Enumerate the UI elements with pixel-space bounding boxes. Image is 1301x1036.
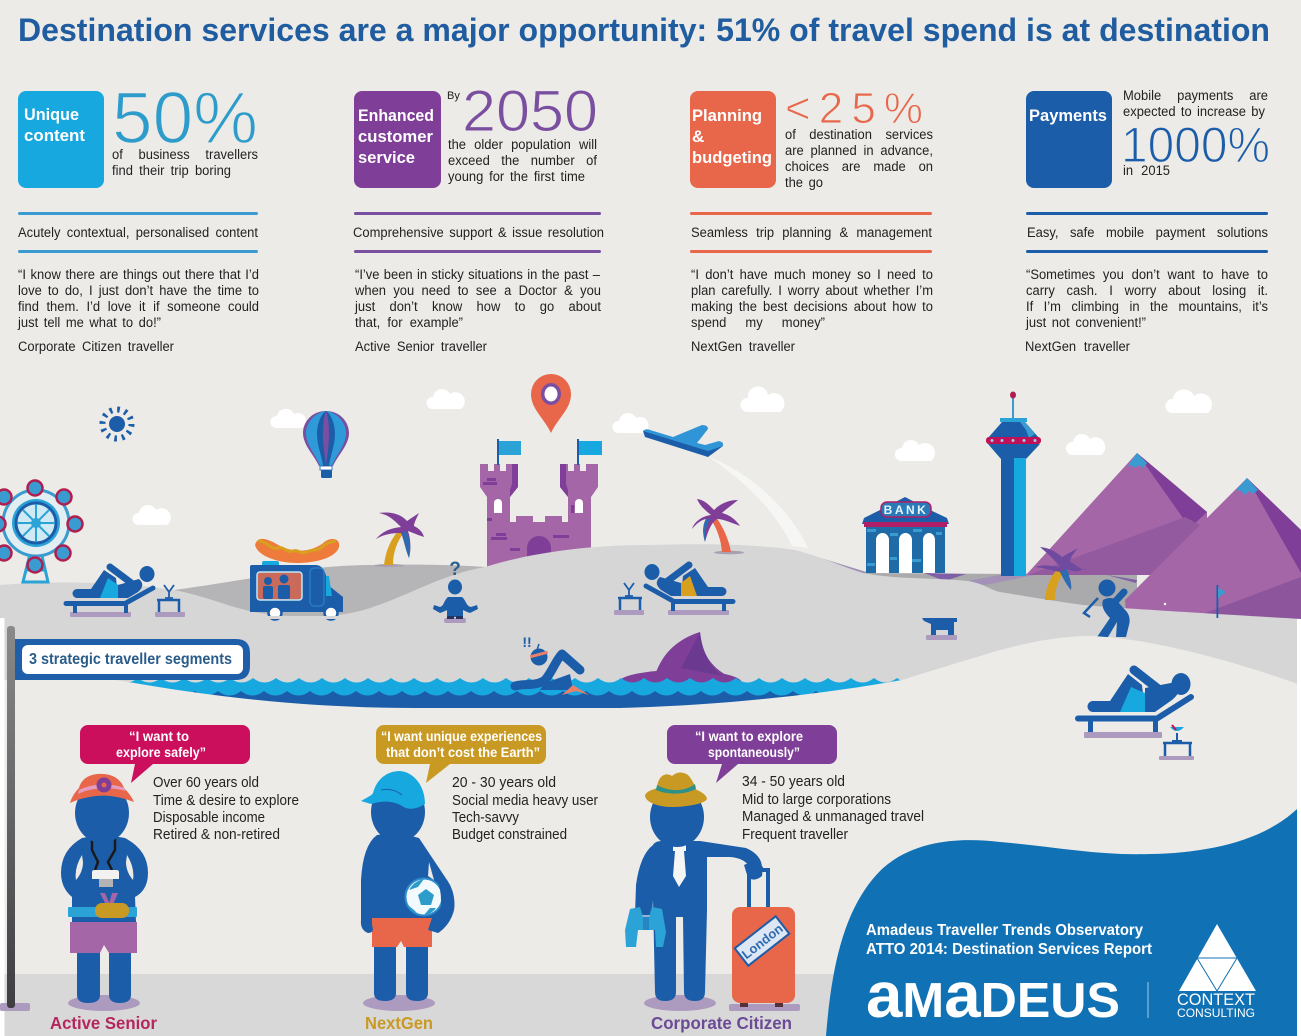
- flag pole and banner: 3 strategic traveller segments: [0, 626, 250, 1011]
- big stat under 25%: <25%: [785, 84, 923, 133]
- quote: “I know there are things out there that I’d: [18, 267, 259, 282]
- icon: plane with trail: [643, 425, 808, 548]
- persona facts: NextGen: [452, 775, 598, 843]
- quote: making the best decisions about how to: [691, 299, 933, 314]
- quote: find them. I’d love it if someone could: [18, 299, 259, 314]
- logo: Context Consulting: [1177, 924, 1256, 1020]
- icon: confused traveller with question mark: ?: [449, 559, 461, 580]
- persona facts: Active Senior: Retired & non-retired: [153, 827, 280, 843]
- quote: love to do, I just don’t have the time to: [18, 283, 259, 298]
- attribution: Active Senior traveller: [355, 339, 487, 354]
- divider between logos: [1148, 982, 1149, 1018]
- quote: carry cash. I worry about losing it.: [1026, 283, 1268, 298]
- stat description: find their trip boring: [112, 163, 231, 178]
- logo: Context Consulting: CONTEXT: [1177, 991, 1255, 1009]
- stat description: choices are made on: [785, 159, 933, 174]
- speech bubble: Active Senior: [80, 725, 250, 783]
- water waves: [100, 678, 910, 721]
- icon: confused traveller with question mark: [433, 559, 478, 623]
- icon: golf flag: [1164, 585, 1226, 618]
- stat description: the older population will: [448, 137, 597, 152]
- stat description: are planned in advance,: [785, 143, 933, 158]
- quote: [18, 267, 259, 330]
- blue corner panel: [826, 805, 1301, 1036]
- persona facts: Corporate Citizen: Mid to large corporations: [742, 792, 891, 808]
- title: Destination services are a major opportunity: 51% of travel spend is at destination: [18, 12, 1270, 48]
- speech bubble: NextGen: “I want unique experiences: [381, 728, 542, 744]
- panel: Payments: [1025, 88, 1270, 354]
- icon: hot dog food van: [250, 539, 344, 620]
- quote: “Sometimes you don’t want to have to: [1026, 267, 1268, 282]
- dividers: [354, 212, 601, 253]
- speech bubble: NextGen: [376, 725, 546, 783]
- white edge strips: [0, 618, 1301, 1036]
- value proposition: Acutely contextual, personalised content: [18, 225, 258, 240]
- speech bubble: Active Senior: “I want to: [129, 728, 189, 744]
- quote: just not convenient!”: [1026, 315, 1146, 330]
- label box: Unique content: content: [24, 126, 85, 145]
- label box: Unique content: Unique: [24, 105, 79, 124]
- report credit text: Amadeus Traveller Trends Observatory: [866, 922, 1143, 939]
- wedge: distant grey dune: [174, 565, 485, 625]
- value proposition: Seamless trip planning & management: [691, 225, 932, 240]
- label box: Payments: Payments: [1029, 106, 1107, 125]
- icon: mountains: [1026, 453, 1301, 622]
- character: NextGen: [361, 771, 454, 1011]
- report credit text: ATTO 2014: Destination Services Report: [866, 941, 1153, 958]
- big stat By 2050: By: [447, 90, 460, 102]
- persona facts: Active Senior: [153, 775, 299, 843]
- character: Active Senior: [61, 774, 148, 1011]
- segment name: Active Senior: Active Senior: [50, 1013, 157, 1033]
- icon: hot air balloon: [303, 411, 349, 478]
- quote: plan carefully. I worry about whether I’m: [691, 283, 933, 298]
- dividers: [1026, 212, 1268, 253]
- stat description: the go: [785, 175, 823, 190]
- logo: Context Consulting: CONSULTING: [1177, 1006, 1255, 1020]
- stat description top: Mobile payments are: [1123, 88, 1268, 103]
- quote: If I’m climbing in the mountains, it’s: [1026, 299, 1268, 314]
- speech bubble: Active Senior: explore safely”: [116, 744, 206, 760]
- label box: Enhanced customer service: Enhanced: [358, 106, 434, 125]
- icon: bank: BANK: [884, 503, 928, 517]
- label box: Unique content: [18, 91, 104, 188]
- icon: castle: [480, 439, 602, 580]
- icon: side table with drink right: [1159, 725, 1194, 760]
- icon: palm tree left: [374, 512, 424, 567]
- logo: Amadeus: aMaDEUS: [866, 959, 1120, 1031]
- stat description: exceed the number of: [448, 153, 597, 168]
- big stat By 2050: 2050: [462, 79, 598, 144]
- icon: lounger with traveller centre: [644, 564, 733, 615]
- front hill ground: [0, 544, 1301, 730]
- icon: clouds: [132, 386, 1212, 525]
- dividers: [18, 212, 258, 253]
- icon: golfer: [1084, 580, 1130, 637]
- icon: palm tree centre: [692, 499, 744, 554]
- label box: Payments: [1026, 91, 1112, 188]
- persona facts: Active Senior: Time & desire to explore: [153, 793, 299, 809]
- panel: Planning & budgeting: [690, 84, 933, 354]
- icon: bank: [862, 497, 949, 573]
- speech bubble: Corporate Citizen: “I want to explore: [695, 728, 803, 744]
- icon: shark fin: [618, 632, 742, 696]
- persona facts: NextGen: Tech-savvy: [452, 810, 520, 826]
- icon: lounger with traveller right: [1078, 670, 1191, 738]
- persona facts: Corporate Citizen: Frequent traveller: [742, 827, 848, 843]
- persona facts: Active Senior: Disposable income: [153, 810, 265, 826]
- speech bubble: Corporate Citizen: [667, 725, 837, 783]
- big stat 50%: 50%: [112, 78, 258, 159]
- label box: Enhanced customer service: customer: [358, 127, 433, 146]
- big stat 1000%: 1000%: [1121, 117, 1270, 173]
- attribution: Corporate Citizen traveller: [18, 339, 174, 354]
- dividers: [690, 212, 932, 253]
- character: Corporate Citizen: [625, 772, 763, 1011]
- persona facts: Corporate Citizen: 34 - 50 years old: [742, 774, 845, 790]
- value proposition: Easy, safe mobile payment solutions: [1027, 225, 1268, 240]
- icon: swimmer: !!: [522, 634, 532, 650]
- attribution: NextGen traveller: [691, 339, 795, 354]
- label box: Enhanced customer service: [354, 91, 441, 188]
- label box: Planning & budgeting: [690, 91, 776, 188]
- stat description top: expected to increase by: [1123, 104, 1265, 119]
- persona facts: Corporate Citizen: Managed & unmanaged travel: [742, 809, 924, 825]
- icon: ferris wheel: [0, 480, 82, 582]
- quote: [354, 267, 601, 330]
- segment name: NextGen: NextGen: [365, 1013, 433, 1033]
- icon: golf cart cart stub: [922, 618, 957, 640]
- quote: [1026, 267, 1268, 330]
- lower background hill: [0, 636, 1301, 1036]
- stat description: of business travellers: [112, 147, 258, 162]
- stat description bottom: in 2015: [1123, 163, 1170, 178]
- icon: swimmer: [515, 634, 589, 695]
- value proposition: Comprehensive support & issue resolution: [353, 225, 604, 240]
- stat description: [785, 127, 933, 190]
- icon: side table with drink centre: [614, 583, 644, 615]
- quote: that, for example”: [355, 315, 463, 330]
- panel: Enhanced customer service: [353, 79, 604, 354]
- icon: suitcase with London tag: London: [739, 921, 786, 962]
- persona facts: Active Senior: Over 60 years old: [153, 775, 259, 791]
- attribution: NextGen traveller: [1025, 339, 1130, 354]
- quote: “I don’t have much money so I need to: [691, 267, 933, 282]
- icon: location pin: [531, 374, 571, 433]
- icon: suitcase with London tag: [729, 870, 800, 1011]
- quote: just tell me what to do!”: [18, 315, 161, 330]
- label box: Enhanced customer service: service: [358, 148, 415, 167]
- persona facts: NextGen: Budget constrained: [452, 827, 567, 843]
- stat description: of destination services: [785, 127, 933, 142]
- icon: side table with drink left: [155, 585, 185, 617]
- label box: Planning & budgeting: budgeting: [692, 148, 772, 167]
- wedge: purple shadow and grey slope: [794, 550, 1137, 612]
- icon: lounger with traveller left: [66, 566, 154, 617]
- report credit text: [866, 922, 1153, 958]
- stat description: [112, 147, 258, 178]
- speech bubble: Corporate Citizen: spontaneously”: [708, 744, 800, 760]
- speech bubble: NextGen: that don’t cost the Earth”: [386, 744, 540, 760]
- flag pole and banner: 3 strategic traveller segments: 3 strategic traveller segments: [29, 651, 232, 668]
- quote: spend my money”: [691, 315, 825, 330]
- persona facts: NextGen: Social media heavy user: [452, 793, 598, 809]
- quote: [691, 267, 933, 330]
- stat description: [448, 137, 597, 184]
- stat description: young for the first time: [448, 169, 585, 184]
- icon: observation tower: [986, 392, 1041, 576]
- bottom ground band: [0, 974, 1301, 1036]
- persona facts: NextGen: 20 - 30 years old: [452, 775, 556, 791]
- quote: when you need to see a Doctor & you: [355, 283, 601, 298]
- icon: palm tree right: [1035, 547, 1085, 600]
- quote: “I’ve been in sticky situations in the past –: [355, 267, 600, 282]
- persona facts: Corporate Citizen: [742, 774, 924, 843]
- quote: just don’t know how to go about: [355, 299, 601, 314]
- segment name: Corporate Citizen: Corporate Citizen: [651, 1013, 792, 1033]
- label box: Planning & budgeting: Planning: [692, 106, 762, 125]
- icon: sun: [102, 410, 132, 438]
- label box: Planning & budgeting: &: [692, 127, 704, 146]
- panel: Unique content: [18, 78, 259, 354]
- stat description top: [1123, 88, 1268, 119]
